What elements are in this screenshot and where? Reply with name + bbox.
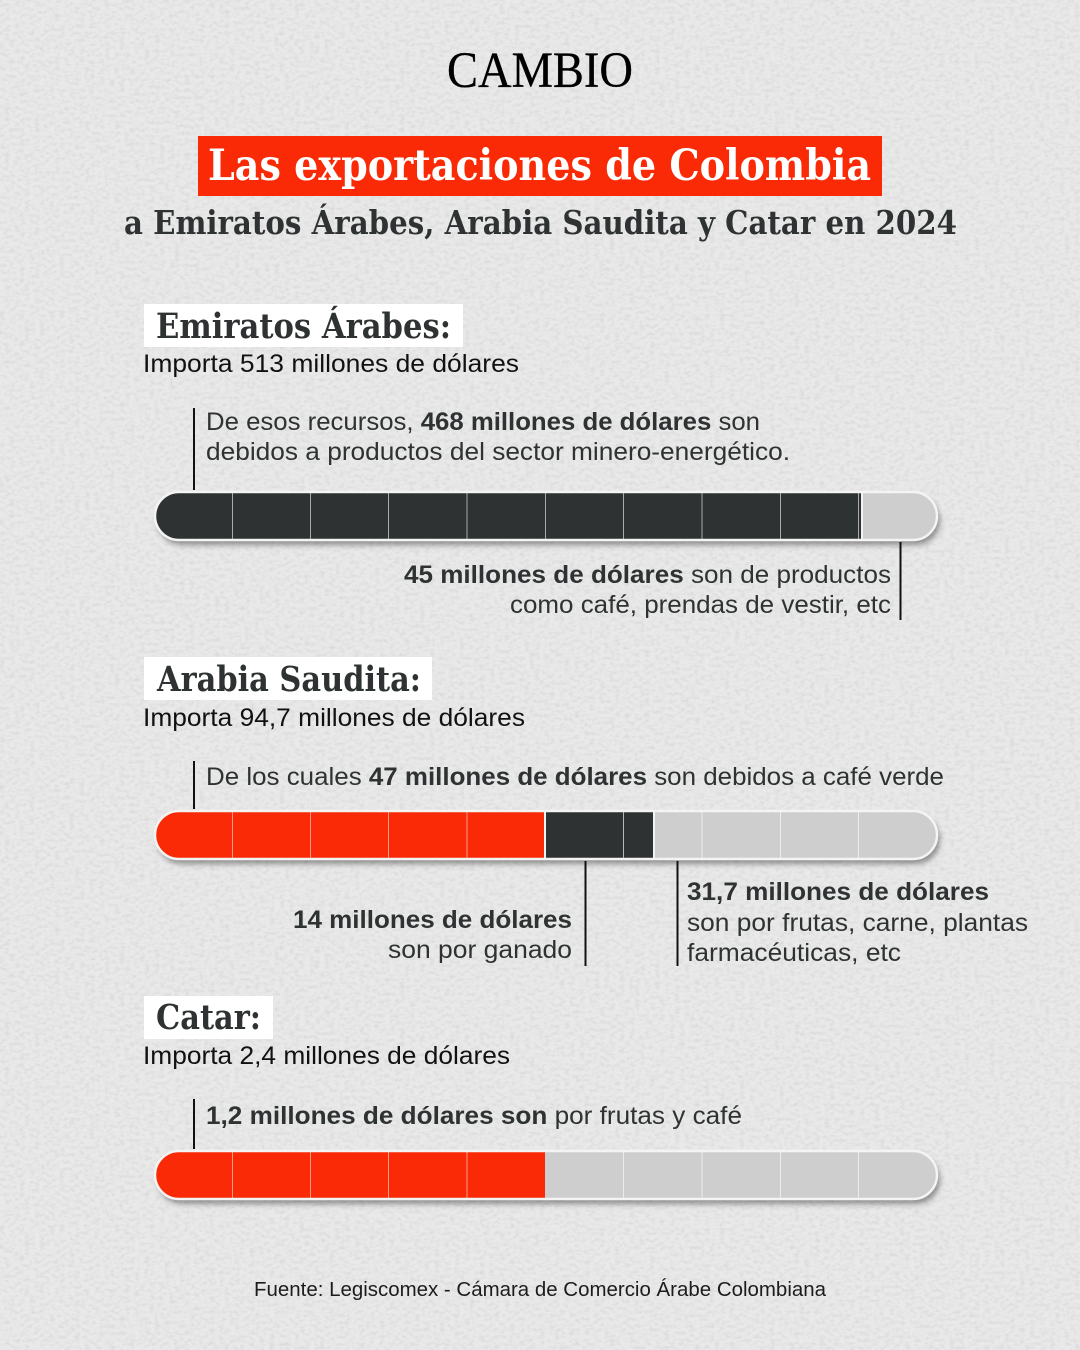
logo: CAMBIO: CAMBIO — [447, 43, 633, 99]
callout: 31,7 millones — [676, 861, 1028, 967]
callout: 1,2 millones: 1,2 millones de dólares son por frutas y café — [206, 1102, 742, 1130]
source footer: Fuente: Legiscomex - Cámara de Comercio Árabe Colombiana — [254, 1278, 827, 1301]
callout: 14 millones — [293, 861, 586, 966]
callout: 31,7 millones: 31,7 millones de dólares — [687, 878, 989, 906]
bar chart: Arabia Saudita — [155, 811, 937, 859]
subtitle: a Emiratos Árabes, Arabia Saudita y Catar en 2024 — [124, 202, 957, 242]
callout: 468 millones — [193, 408, 790, 490]
callout: 45 millones — [404, 542, 902, 620]
panel: Arabia Saudita — [143, 657, 1028, 967]
callout: 468 millones: De esos recursos, 468 millones de dólares son — [206, 408, 760, 436]
callout: 14 millones: son por ganado — [388, 936, 572, 964]
text: total Emiratos: Importa 513 millones de dólares — [143, 350, 519, 378]
callout: 45 millones: como café, prendas de vestir, etc — [510, 591, 891, 619]
heading: Arabia Saudita: Arabia Saudita: — [156, 659, 421, 700]
panel: Catar — [143, 996, 937, 1199]
title: Las exportaciones de Colombia — [208, 141, 871, 191]
callout: 47 millones: De los cuales 47 millones de dólares son debidos a café verde — [206, 763, 944, 791]
callout: 31,7 millones: son por frutas, carne, plantas — [687, 909, 1028, 937]
bar chart: Emiratos — [155, 492, 937, 540]
text: total Arabia Saudita: Importa 94,7 millones de dólares — [143, 704, 525, 732]
callout: 14 millones: 14 millones de dólares — [293, 906, 572, 934]
panel: Emiratos Árabes — [143, 304, 937, 620]
heading: Catar: Catar: — [156, 997, 261, 1038]
callout: 31,7 millones: farmacéuticas, etc — [687, 939, 901, 967]
heading: Emiratos Árabes: Emiratos Árabes: — [156, 305, 451, 347]
callout: 45 millones: 45 millones de dólares son de productos — [404, 561, 891, 589]
callout: 468 millones: debidos a productos del sector minero-energético. — [206, 438, 790, 466]
text: total Catar: Importa 2,4 millones de dólares — [143, 1042, 510, 1070]
bar chart: Catar — [155, 1151, 937, 1199]
